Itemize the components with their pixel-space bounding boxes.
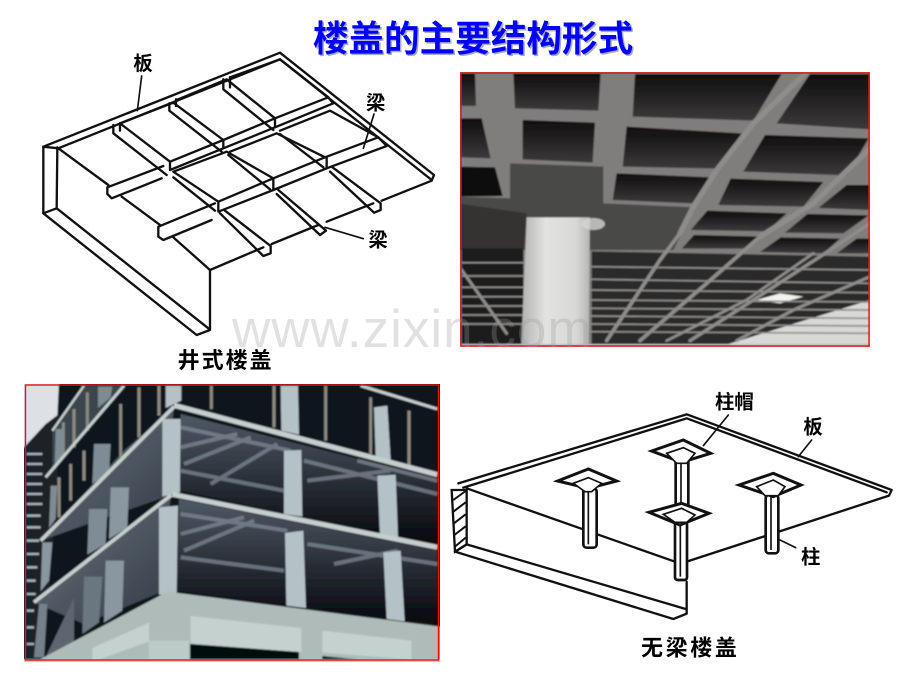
distant tower [24,414,59,664]
long diagonal ribs [680,72,870,237]
slab and wall outline [43,53,434,335]
caption: 井式楼盖: 井式楼盖 [178,348,274,373]
column: left [558,469,617,548]
label: 板: 板 [803,416,823,438]
column: right [739,473,801,553]
caption: 无梁楼盖: 无梁楼盖 [641,636,740,661]
right face slab undersides with ribs [181,414,437,544]
hatched end section [452,490,467,552]
photo: concrete building frame [21,381,443,667]
title: 楼盖的主要结构形式 [314,20,635,60]
sky [21,381,59,447]
concrete base [37,592,440,665]
columns [34,386,405,657]
photo border [461,73,869,346]
label: 梁 upper: 梁 [366,92,385,114]
diagram: waffle slab floor (井式楼盖) [43,53,434,373]
photo border [26,385,438,660]
flat slab zones [457,163,695,250]
label: 板: 板 [133,53,153,75]
slab outline [455,414,892,619]
upper windows [59,386,409,517]
title: 楼盖的主要结构形式 [313,19,633,59]
beams running left to right [107,166,215,240]
label: 梁 lower: 梁 [368,230,388,252]
upper coffers [460,73,870,253]
lower dense coffers [462,248,523,345]
watermark: www.zixin.com [231,300,593,359]
diagram: flat slab floor (无梁楼盖) [452,391,892,661]
round column [521,217,590,347]
beams running front to back [113,77,381,256]
raised panels, middle row [173,111,387,212]
slab edges [34,386,437,602]
photo: waffle ceiling with round column [457,67,873,353]
left face slab undersides [52,386,124,467]
label: 柱帽: 柱帽 [715,391,754,413]
leader lines [137,76,374,239]
column: front center [649,503,709,580]
label: 柱: 柱 [801,546,820,568]
raised panels, rear row [120,59,333,170]
leader lines [703,415,812,548]
column: rear center [652,440,711,518]
